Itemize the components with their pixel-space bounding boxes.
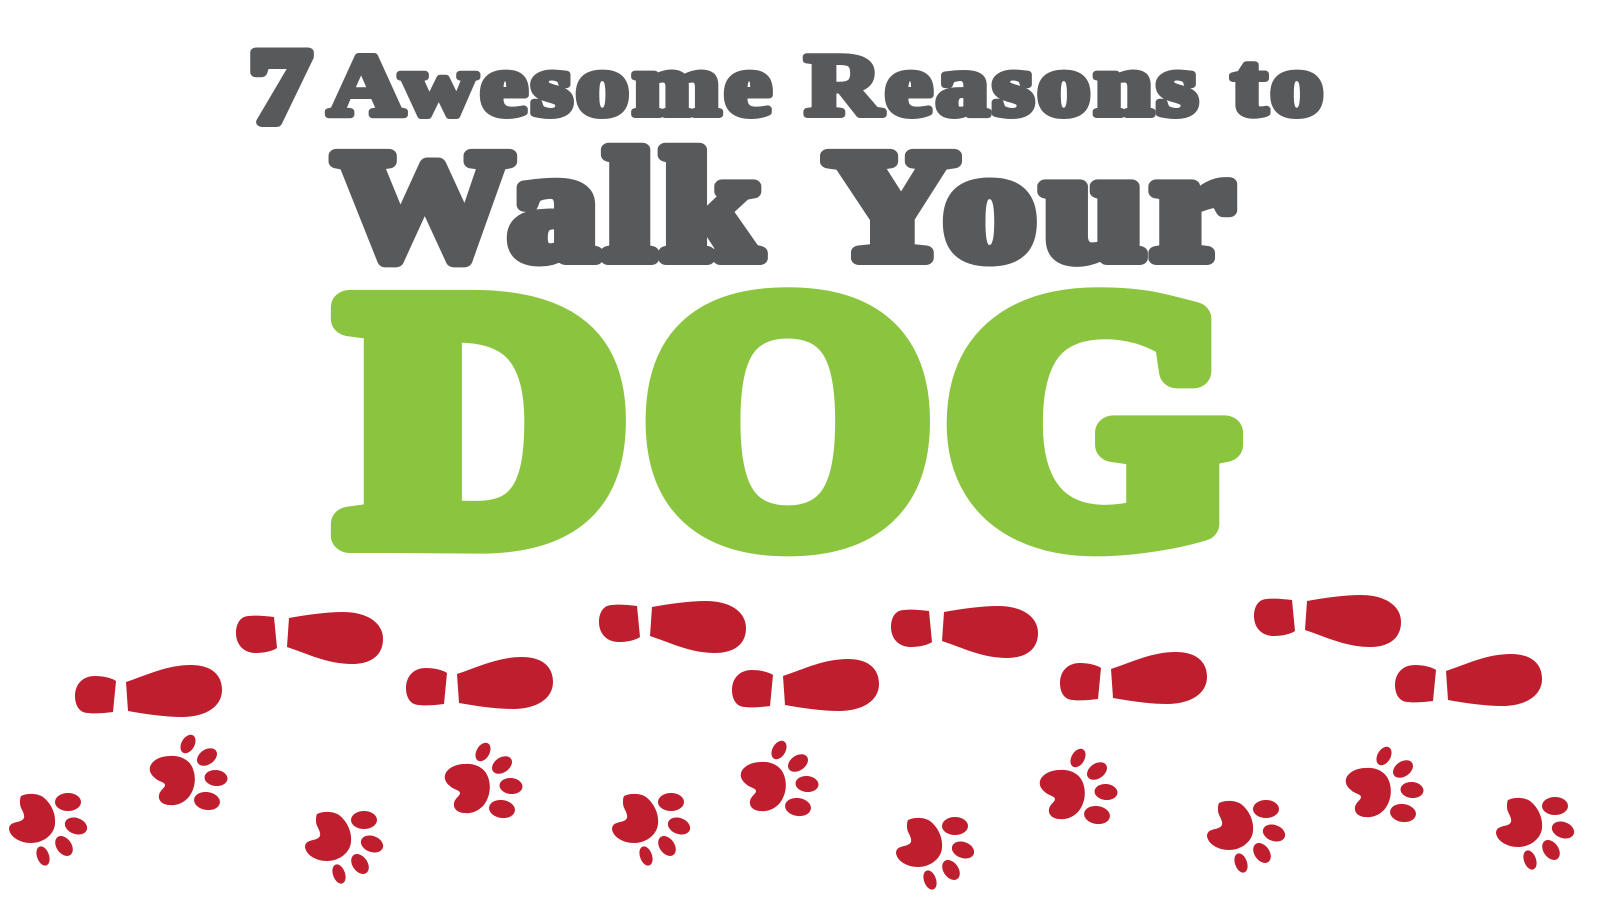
title line 2: Walk Your: Walk (334, 119, 767, 292)
boot print 5 (732, 659, 879, 711)
boot print 6 (891, 606, 1038, 658)
paw print 6 (741, 738, 819, 818)
title line 3: DOG: O (646, 224, 930, 612)
paw print 2 (150, 732, 228, 812)
title (249, 28, 1327, 612)
paw print 11 (1496, 797, 1577, 871)
boot print 8 (1254, 595, 1401, 647)
title line 3: DOG: D (343, 224, 626, 612)
title line 1: 7 Awesome Reasons to (249, 28, 1327, 145)
boot prints trail (75, 595, 1542, 717)
paw print 4 (445, 740, 523, 820)
paw print 7 (896, 817, 977, 891)
boot print 1 (75, 665, 222, 717)
boot print 4 (599, 601, 746, 653)
title line 3: DOG: G (947, 224, 1235, 612)
boot print 2 (236, 612, 383, 664)
paw print 10 (1346, 744, 1424, 824)
title line 2: Walk Your: Your (825, 119, 1240, 292)
paw print 1 (9, 793, 90, 867)
boot print 9 (1395, 654, 1542, 706)
paw print 3 (305, 811, 386, 885)
boot print 3 (406, 657, 553, 709)
paw prints trail (9, 732, 1577, 891)
boot print 7 (1060, 652, 1207, 704)
paw print 8 (1040, 746, 1118, 826)
title line 1: 7 Awesome Reasons to: Awesome Reasons to (328, 38, 1327, 134)
paw print 5 (612, 793, 693, 867)
title line 1: 7 Awesome Reasons to: 7 (249, 28, 311, 145)
paw print 9 (1207, 800, 1288, 874)
